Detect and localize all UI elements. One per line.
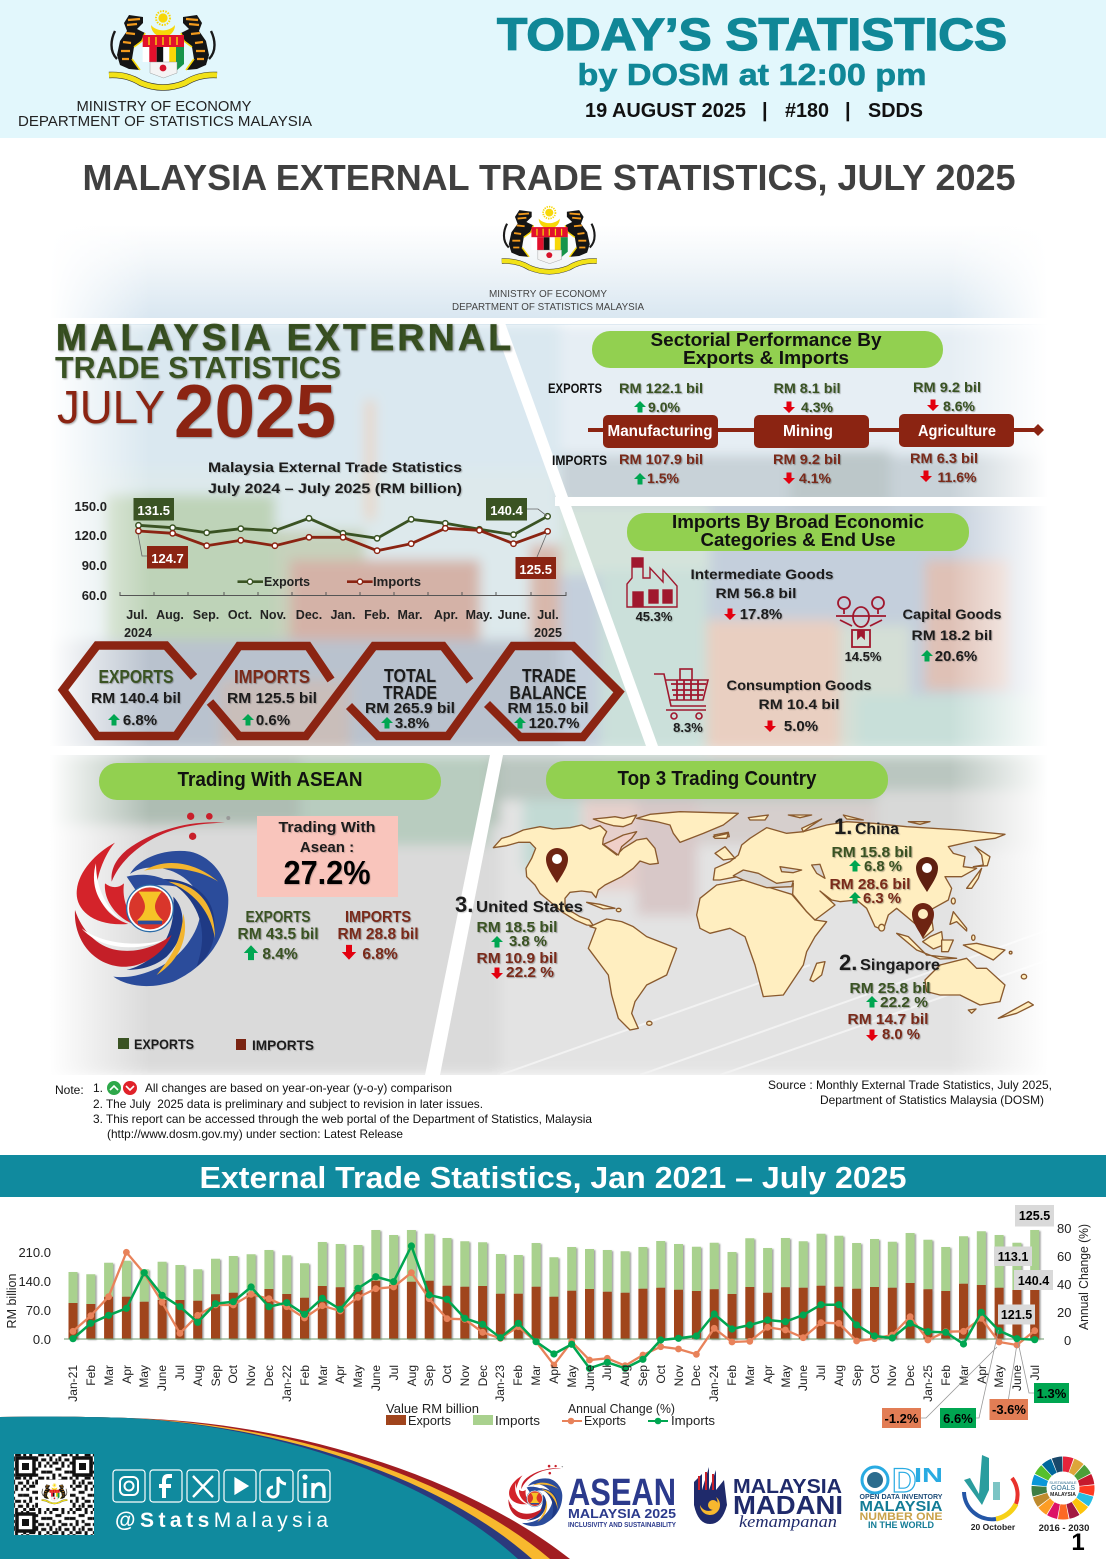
heading pill: top 3 trading country	[546, 761, 888, 799]
bar chart: exports and imports value: 70.0	[26, 1303, 51, 1318]
month axis labels: Jul	[387, 1365, 401, 1380]
category: capital goods: 14.5%	[845, 649, 882, 664]
social media icons	[113, 1470, 330, 1502]
callout: trading with ASEAN share	[257, 816, 398, 897]
value labels: 113.1	[998, 1250, 1028, 1264]
line chart: exports and imports: Feb.	[364, 608, 390, 622]
icon: map pin Singapore	[912, 903, 934, 938]
line chart: exports and imports: Imports	[373, 575, 421, 589]
line chart: exports and imports: Sep.	[193, 608, 219, 622]
notes: 3. This report can be accessed through the web portal of the Department of Statistics, Malaysia	[93, 1112, 592, 1126]
month axis labels: Oct	[226, 1364, 240, 1384]
stat: total trade	[365, 666, 455, 732]
social media handle: @StatsMalaysia	[115, 1509, 328, 1532]
country: United States: 3.	[455, 892, 473, 917]
bar chart: exports and imports value: 40	[1057, 1277, 1071, 1292]
chart legend: Exports	[408, 1414, 451, 1428]
sector: mining: RM 8.1 bil	[774, 380, 840, 396]
ASEAN imports	[338, 909, 418, 963]
month axis labels: Aug	[191, 1365, 205, 1386]
logo: ODIN: IN THE WORLD	[868, 1520, 934, 1530]
country: United States: United States	[476, 899, 583, 916]
line chart: exports and imports: May.	[466, 608, 492, 622]
sector: manufacturing	[603, 380, 718, 486]
month axis labels: May	[137, 1365, 151, 1388]
ASEAN exports: RM 43.5 bil	[238, 926, 318, 943]
ministry name center: MINISTRY OF ECONOMY	[489, 288, 607, 300]
month axis labels: Nov	[244, 1365, 258, 1386]
month axis labels: Mar	[743, 1365, 757, 1386]
stat: trade balance	[508, 666, 588, 732]
month axis labels: May	[565, 1365, 579, 1388]
sector: manufacturing: 1.5%	[647, 470, 680, 486]
line chart: exports and imports: 60.0	[82, 588, 107, 603]
sector: mining: 4.1%	[799, 470, 832, 486]
country: China: 6.8 %	[864, 858, 902, 875]
sector labels: EXPORTS	[548, 380, 602, 396]
month axis labels: Mar	[102, 1365, 116, 1386]
icon: coat of arms header	[109, 11, 217, 88]
ASEAN legend: IMPORTS	[252, 1037, 314, 1053]
country: China: China	[855, 821, 899, 838]
callout: trading with ASEAN share: Trading With	[278, 819, 376, 836]
country: China: 1.	[834, 814, 852, 839]
bar chart: exports and imports value: Annual Change (%)	[1077, 1224, 1091, 1330]
line chart: exports and imports: Jul.	[126, 608, 148, 622]
banner: time series heading	[0, 1155, 1106, 1197]
line chart: exports and imports: Exports	[264, 575, 310, 589]
category: consumption goods	[673, 677, 872, 735]
sector labels	[548, 380, 607, 468]
footer swoosh	[0, 1417, 570, 1559]
icon: factory	[627, 558, 677, 607]
logo: 20 October: 20 October	[971, 1522, 1016, 1532]
percent labels	[882, 1383, 1069, 1428]
month axis labels: Apr	[333, 1365, 347, 1384]
sector: agriculture: 11.6%	[938, 469, 977, 485]
ASEAN imports: RM 28.8 bil	[338, 926, 418, 943]
ministry name center	[452, 288, 644, 313]
month axis labels: Dec	[903, 1365, 917, 1386]
source note	[768, 1078, 1052, 1107]
logo: Malaysia Madani	[694, 1467, 843, 1531]
sector: agriculture	[899, 379, 1014, 485]
release date line: |	[762, 100, 768, 122]
logo: ASEAN Malaysia 2025: ASEAN	[568, 1472, 676, 1514]
percent labels: 1.3%	[1037, 1386, 1067, 1401]
month axis labels: Apr	[120, 1365, 134, 1384]
heading pill: trading with ASEAN	[99, 763, 441, 800]
heading: Malaysia External Trade Statistics July 2025: TRADE STATISTICS	[55, 350, 341, 385]
country: China: 6.3 %	[863, 890, 901, 907]
leader lines	[921, 1330, 1034, 1418]
notes: (http://www.dosm.gov.my) under section: Latest Release	[107, 1127, 403, 1141]
line chart: exports and imports: 2024	[124, 626, 152, 640]
line chart: exports and imports: 124.7	[151, 551, 184, 566]
month axis labels: Feb	[84, 1365, 98, 1386]
ministry name center: DEPARTMENT OF STATISTICS MALAYSIA	[452, 301, 644, 313]
value labels: 140.4	[1018, 1274, 1049, 1288]
SDG labels: GOALS	[1051, 1485, 1075, 1492]
sector: manufacturing: RM 107.9 bil	[619, 451, 703, 467]
month axis labels: Apr	[761, 1365, 775, 1384]
month axis labels: Sep	[209, 1365, 223, 1386]
month axis labels: Jan-22	[280, 1365, 294, 1402]
month axis labels: Jul	[600, 1365, 614, 1380]
sector: manufacturing: 9.0%	[648, 399, 681, 415]
value labels	[994, 1205, 1054, 1324]
icon: coat of arms center	[502, 207, 597, 272]
month axis labels: June	[155, 1365, 169, 1391]
ASEAN exports	[238, 909, 318, 963]
category: consumption goods: 5.0%	[784, 718, 818, 735]
icon: ASEAN swirl logo	[75, 813, 230, 986]
banner: time series heading: External Trade Statistics, Jan 2021 – July 2025	[200, 1160, 906, 1195]
logo: ODIN: NUMBER ONE	[860, 1511, 942, 1523]
chart legend: Exports	[584, 1414, 626, 1428]
month axis labels: Jul	[1028, 1365, 1042, 1380]
line chart: exports and imports: July 2024 – July 2025 (RM billion)	[208, 480, 462, 496]
SDG labels: 2016 - 2030	[1039, 1523, 1089, 1534]
icon: plane	[836, 597, 886, 647]
category: intermediate goods: 45.3%	[636, 609, 673, 624]
month axis labels: Jan-25	[921, 1365, 935, 1402]
sector: agriculture: 8.6%	[943, 398, 976, 414]
heading pill: top 3 trading country: Top 3 Trading Country	[618, 768, 817, 790]
stat: exports: RM 140.4 bil	[91, 690, 181, 707]
sector: agriculture: Agriculture	[918, 423, 996, 440]
line chart: exports and imports: Jul.	[537, 608, 559, 622]
month axis labels: Aug	[618, 1365, 632, 1386]
month axis labels: Dec	[262, 1365, 276, 1386]
panel: photo background	[60, 249, 1036, 1075]
line chart: exports and imports: 125.5	[519, 562, 552, 577]
ministry name	[18, 99, 312, 130]
country: Singapore: 8.0 %	[882, 1026, 920, 1043]
stat: exports: 6.8%	[123, 712, 157, 729]
month axis labels: Jul	[814, 1365, 828, 1380]
ministry name: MINISTRY OF ECONOMY	[76, 99, 252, 115]
line chart: exports and imports: June.	[498, 608, 530, 622]
line chart: exports and imports: Jan.	[330, 608, 356, 622]
month axis labels: Oct	[440, 1364, 454, 1384]
sector: mining: Mining	[783, 423, 833, 440]
ministry name: DEPARTMENT OF STATISTICS MALAYSIA	[18, 114, 312, 130]
stat: exports	[91, 667, 181, 729]
month axis labels: Jan-24	[707, 1365, 721, 1402]
logo: SDG wheel	[1029, 1454, 1097, 1522]
month axis labels: Dec	[476, 1365, 490, 1386]
month axis labels: Mar	[316, 1365, 330, 1386]
sector: agriculture: RM 9.2 bil	[913, 379, 981, 395]
heading pill: imports by broad economic categories	[627, 511, 969, 551]
country: United States: RM 10.9 bil	[476, 950, 558, 967]
percent labels: -1.2%	[885, 1411, 919, 1426]
source note: Department of Statistics Malaysia (DOSM)	[820, 1093, 1044, 1107]
category: consumption goods: RM 10.4 bil	[758, 696, 840, 712]
notes: Note:	[55, 1083, 84, 1097]
heading pill: imports by broad economic categories: Categories & End Use	[700, 529, 896, 550]
sector: mining: 4.3%	[801, 399, 834, 415]
month axis labels: Dec	[689, 1365, 703, 1386]
line chart: exports and imports: 120.0	[74, 528, 107, 543]
category: capital goods	[845, 606, 1002, 665]
stat: imports: IMPORTS	[234, 667, 310, 687]
month axis labels: Apr	[547, 1365, 561, 1384]
month axis labels: Feb	[725, 1365, 739, 1386]
month axis labels: Feb	[939, 1365, 953, 1386]
month axis labels: Apr	[975, 1365, 989, 1384]
sector: manufacturing: RM 122.1 bil	[619, 380, 703, 396]
chart legend: Value RM billion	[386, 1402, 479, 1416]
sector: mining	[754, 380, 869, 486]
country: Singapore: Singapore	[860, 957, 940, 974]
line chart: annual change exports	[73, 1252, 1035, 1366]
header title: TODAY’S STATISTICS	[497, 9, 1007, 60]
line chart: exports and imports: Aug.	[156, 608, 184, 622]
icon: map pin United States	[546, 848, 568, 883]
header band	[0, 0, 1106, 138]
category: intermediate goods	[636, 566, 834, 624]
bar chart: exports and imports value	[5, 1221, 1091, 1348]
country: United States: 3.8 %	[509, 933, 547, 950]
callout: trading with ASEAN share: Asean :	[300, 839, 354, 856]
ASEAN legend	[118, 1036, 314, 1053]
header title: by DOSM at 12:00 pm	[578, 57, 926, 92]
sector flow line	[588, 424, 1044, 436]
ASEAN exports: 8.4%	[262, 946, 298, 963]
notes: 2. The July 2025 data is preliminary and subject to revision in later issues.	[93, 1097, 483, 1111]
month axis labels: Feb	[511, 1365, 525, 1386]
stat: imports: RM 125.5 bil	[227, 690, 317, 707]
notes: 1.	[93, 1081, 103, 1095]
line chart: exports and imports: Apr.	[434, 608, 458, 622]
notes	[55, 1081, 592, 1141]
country: United States: RM 18.5 bil	[476, 919, 558, 936]
chart legend	[386, 1402, 715, 1428]
line chart: annual change imports	[73, 1246, 1035, 1368]
release date line: #180	[785, 100, 829, 122]
bar chart: exports and imports value: RM billion	[5, 1274, 19, 1328]
category: capital goods: Capital Goods	[902, 606, 1002, 622]
heading: Malaysia External Trade Statistics July 2025	[55, 317, 511, 453]
bar chart: exports and imports value: 140.0	[18, 1274, 51, 1289]
category: capital goods: RM 18.2 bil	[912, 627, 992, 643]
heading pill: imports by broad economic categories: Imports By Broad Economic	[672, 511, 924, 532]
country: China: RM 28.6 bil	[830, 876, 910, 893]
stat: total trade: TOTAL	[384, 666, 436, 686]
heading pill: sectorial performance: Sectorial Performance By	[650, 329, 882, 350]
ASEAN legend: EXPORTS	[134, 1036, 194, 1052]
stat: trade balance: 120.7%	[529, 715, 579, 732]
SDG labels: SUSTAINABLE	[1049, 1480, 1077, 1485]
country: China: RM 15.8 bil	[832, 844, 912, 861]
notes: All changes are based on year-on-year (y-o-y) comparison	[145, 1081, 452, 1095]
category: intermediate goods: RM 56.8 bil	[716, 585, 796, 601]
month axis labels: Nov	[458, 1365, 472, 1386]
bar chart: exports and imports value: 60	[1057, 1249, 1071, 1264]
bar chart: exports and imports value: 20	[1057, 1305, 1071, 1320]
logo: Malaysia Madani: kemampanan	[739, 1512, 837, 1531]
stat: trade balance: TRADE	[522, 666, 576, 686]
ASEAN imports: IMPORTS	[345, 909, 411, 926]
logo: ASEAN Malaysia 2025	[508, 1465, 676, 1529]
icon: map pin China	[916, 857, 938, 892]
heading pill: sectorial performance: Exports & Imports	[683, 347, 849, 368]
line chart: exports and imports: 2025	[534, 626, 562, 640]
logo: Malaysia Madani: MADANI	[733, 1490, 843, 1520]
heading pill: sectorial performance	[592, 329, 943, 368]
release date line: |	[845, 100, 851, 122]
country: Singapore	[839, 950, 940, 1043]
header title	[497, 9, 1007, 92]
month axis labels: Oct	[654, 1364, 668, 1384]
release date line: SDDS	[868, 100, 923, 122]
bar chart: exports and imports value: 210.0	[18, 1245, 51, 1260]
bar chart: exports and imports value: 80	[1057, 1221, 1071, 1236]
month axis labels: Sep	[636, 1365, 650, 1386]
month axis labels: Jul	[173, 1365, 187, 1380]
callout: trading with ASEAN share: 27.2%	[284, 854, 370, 891]
ASEAN imports: 6.8%	[362, 946, 398, 963]
stat: exports: EXPORTS	[98, 667, 174, 687]
country: Singapore: 22.2 %	[880, 994, 928, 1011]
stat: total trade: 3.8%	[395, 715, 429, 732]
line chart: exports and imports: 150.0	[74, 499, 107, 514]
line chart: exports and imports	[74, 459, 566, 640]
value labels: 125.5	[1019, 1209, 1050, 1223]
stat: imports	[227, 667, 317, 729]
sector: manufacturing: Manufacturing	[608, 423, 712, 440]
bar chart: exports and imports value: 0	[1064, 1333, 1071, 1348]
main title: MALAYSIA EXTERNAL TRADE STATISTICS, JULY 2025	[82, 157, 1016, 198]
line chart: exports and imports: Mar.	[397, 608, 423, 622]
month axis labels: Aug	[405, 1365, 419, 1386]
line chart: exports and imports: Malaysia External Trade Statistics	[208, 459, 462, 475]
percent labels: 6.6%	[943, 1411, 973, 1426]
country: United States	[455, 892, 583, 981]
logo: ASEAN Malaysia 2025: MALAYSIA 2025	[568, 1506, 676, 1521]
icon: shopping cart	[654, 669, 708, 719]
category: consumption goods: Consumption Goods	[726, 677, 872, 693]
heading: Malaysia External Trade Statistics July 2025: JULY	[57, 381, 165, 433]
ASEAN exports: EXPORTS	[246, 909, 310, 926]
month axis labels: Sep	[850, 1365, 864, 1386]
month axis labels: May	[351, 1365, 365, 1388]
month axis labels: Oct	[868, 1364, 882, 1384]
SDG labels	[1039, 1480, 1089, 1534]
country: United States: 22.2 %	[506, 964, 554, 981]
percent labels: -3.6%	[992, 1402, 1026, 1417]
heading pill: trading with ASEAN: Trading With ASEAN	[178, 769, 362, 791]
logo: ODIN: D	[892, 1462, 917, 1500]
month axis labels: June	[796, 1365, 810, 1391]
stat: total trade: TRADE	[383, 683, 437, 703]
chart legend: Imports	[671, 1414, 715, 1428]
sector: agriculture: RM 6.3 bil	[910, 450, 978, 466]
category: consumption goods: 8.3%	[673, 720, 703, 735]
country: China	[830, 814, 912, 907]
release date line	[585, 100, 923, 122]
month axis labels: June	[369, 1365, 383, 1391]
logo: ODIN: IN	[914, 1465, 943, 1487]
month axis labels	[66, 1364, 1042, 1402]
country: Singapore: RM 25.8 bil	[850, 980, 930, 997]
month axis labels: Nov	[885, 1365, 899, 1386]
sector labels: IMPORTS	[552, 452, 607, 468]
page number: 1	[1071, 1529, 1085, 1556]
line chart: exports and imports: Nov.	[260, 608, 286, 622]
heading: Malaysia External Trade Statistics July 2025: MALAYSIA EXTERNAL	[56, 317, 511, 358]
stat: trade balance: RM 15.0 bil	[508, 700, 588, 717]
chart legend: Annual Change (%)	[568, 1402, 675, 1416]
country: Singapore: RM 14.7 bil	[848, 1011, 928, 1028]
bar chart: exports and imports value: 0.0	[33, 1332, 51, 1347]
chart legend: Imports	[495, 1414, 540, 1428]
source note: Source : Monthly External Trade Statistics, July 2025,	[768, 1078, 1052, 1092]
category: capital goods: 20.6%	[935, 648, 977, 665]
logo: ODIN: MALAYSIA	[860, 1498, 943, 1515]
month axis labels: Nov	[672, 1365, 686, 1386]
logo: ODIN	[860, 1462, 943, 1530]
line chart: exports and imports: 140.4	[490, 503, 524, 518]
month axis labels: Sep	[422, 1365, 436, 1386]
logo: Malaysia Madani: MALAYSIA	[733, 1476, 842, 1498]
country: Singapore: 2.	[839, 950, 857, 975]
hexagon chain frames	[63, 646, 619, 737]
stat: imports: 0.6%	[256, 712, 290, 729]
month axis labels: June	[583, 1365, 597, 1391]
month axis labels: June	[1010, 1365, 1024, 1391]
line chart: exports and imports: 90.0	[82, 558, 107, 573]
month axis labels: Mar	[529, 1365, 543, 1386]
release date line: 19 AUGUST 2025	[585, 100, 746, 122]
stat: trade balance: BALANCE	[510, 683, 586, 703]
logo: 20 October	[964, 1455, 1018, 1532]
line chart: exports and imports: Oct.	[228, 608, 252, 622]
world map	[493, 812, 1033, 1030]
value labels: 121.5	[1001, 1308, 1032, 1322]
month axis labels: May	[992, 1365, 1006, 1388]
sector: mining: RM 9.2 bil	[773, 451, 841, 467]
month axis labels: Mar	[957, 1365, 971, 1386]
logo: ODIN: OPEN DATA INVENTORY	[860, 1492, 942, 1501]
heading: Malaysia External Trade Statistics July 2025: 2025	[174, 369, 336, 453]
month axis labels: Jan-23	[493, 1365, 507, 1402]
SDG labels: MALAYSIA	[1050, 1492, 1076, 1498]
line chart: exports and imports: 131.5	[137, 503, 170, 518]
month axis labels: May	[779, 1365, 793, 1388]
category: intermediate goods: 17.8%	[740, 606, 782, 623]
category: intermediate goods: Intermediate Goods	[690, 566, 834, 582]
month axis labels: Jan-21	[66, 1365, 80, 1402]
stat: total trade: RM 265.9 bil	[365, 700, 455, 717]
month axis labels: Aug	[832, 1365, 846, 1386]
logo: ASEAN Malaysia 2025: INCLUSIVITY AND SUSTAINABILITY	[568, 1522, 676, 1529]
month axis labels: Feb	[298, 1365, 312, 1386]
QR code	[14, 1454, 94, 1535]
line chart: exports and imports: Dec.	[296, 608, 322, 622]
